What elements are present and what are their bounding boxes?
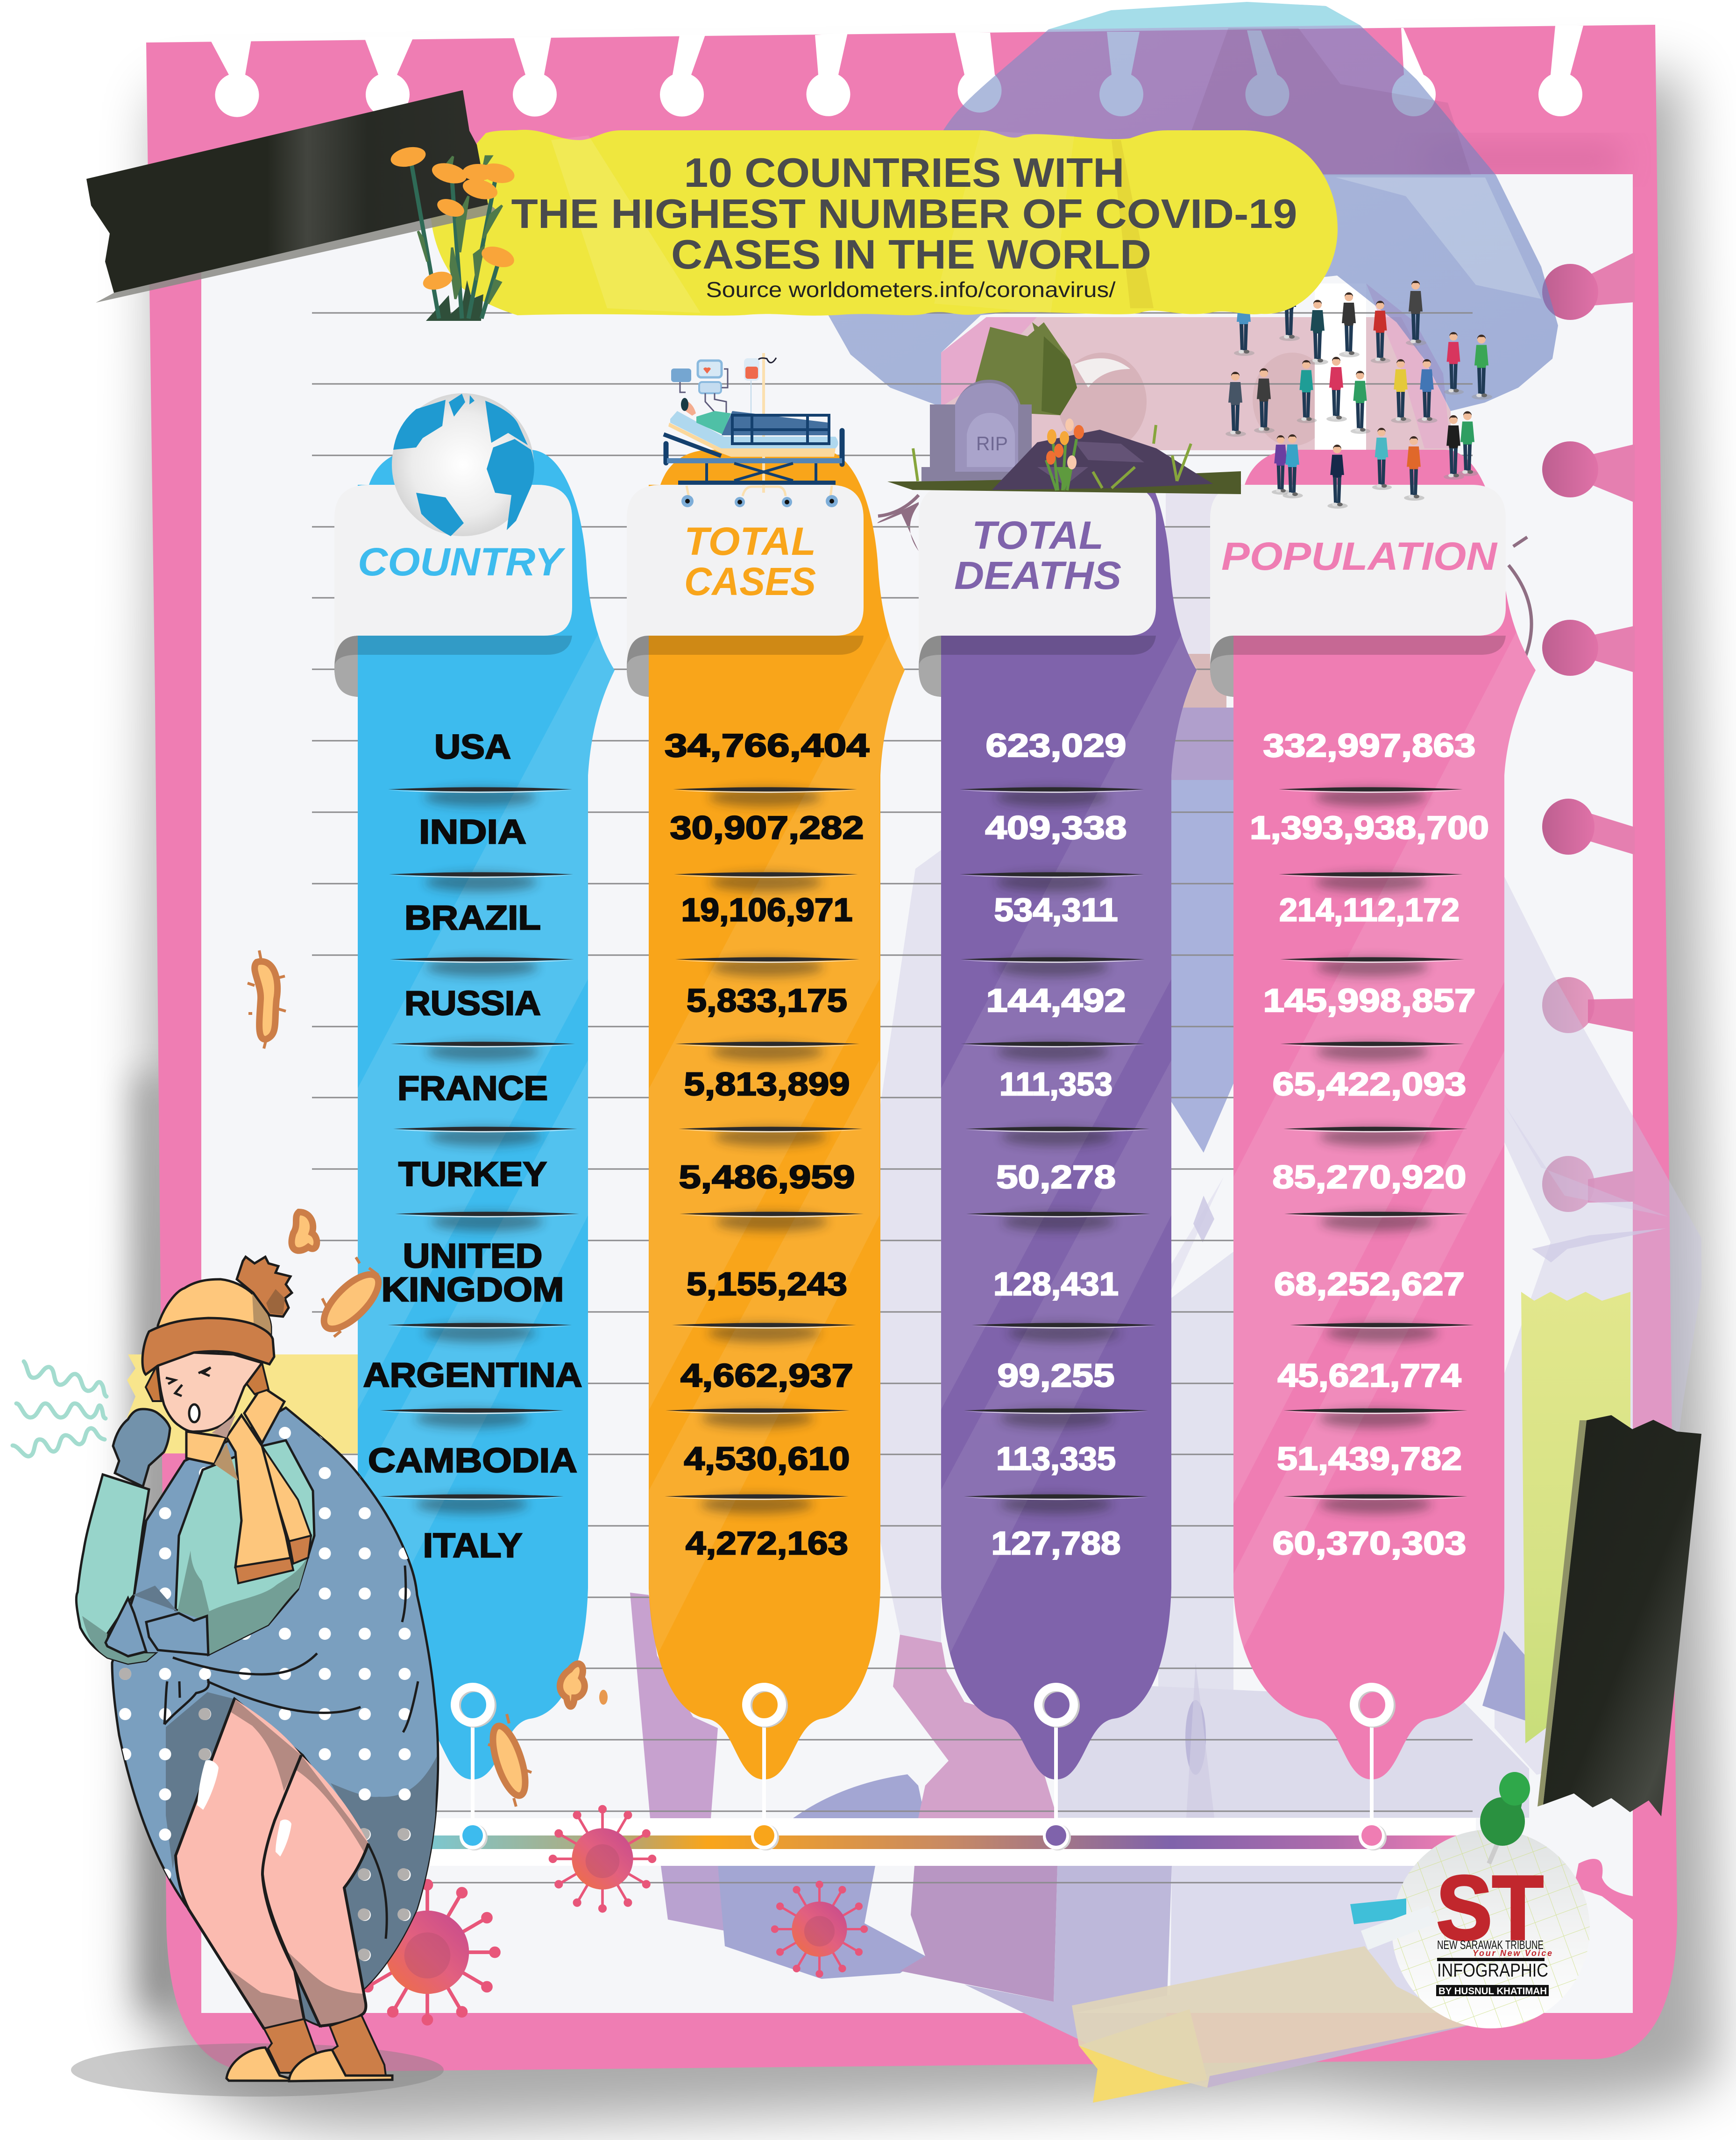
text: total deaths values: 534,311 [994, 892, 1118, 928]
blanket [112, 1408, 438, 1990]
left leg [176, 1699, 320, 2028]
ruled lines [312, 313, 1473, 1883]
column: total deaths (purple) [941, 450, 1209, 1779]
blue glove [718, 1866, 925, 1979]
text: total deaths values: 128,431 [993, 1266, 1119, 1302]
coat below the columns [1046, 1681, 1529, 1818]
lavender lower coat [964, 1866, 1172, 2074]
coat centre panel [1158, 1252, 1233, 1818]
title text: 10 COUNTRIES WITH [684, 149, 1125, 196]
logo badge: New Sarawak Tribune: ST [1437, 1857, 1543, 1959]
small white tape [1361, 1906, 1436, 1950]
icon: hospital bed [664, 353, 842, 507]
column: total cases (orange) [649, 450, 917, 1779]
tape: black, top left [86, 90, 500, 303]
text: total deaths values [985, 727, 1127, 1561]
coat lens between columns [1193, 1196, 1214, 1242]
text: total cases values: 19,106,971 [681, 892, 853, 928]
text: total cases values: 34,766,404 [665, 727, 869, 764]
icon: crowd of people [1226, 276, 1492, 509]
text: total cases values: 4,272,163 [686, 1525, 848, 1561]
cold wavy lines [13, 1361, 106, 1456]
text: total deaths values: 99,255 [998, 1357, 1114, 1394]
text: total deaths values: 111,353 [999, 1066, 1112, 1102]
title banner [431, 130, 1338, 316]
mitten [113, 1409, 170, 1487]
text: country names: USA [434, 728, 511, 766]
text: total deaths values: 409,338 [985, 809, 1127, 846]
text: total cases values: 5,813,899 [684, 1066, 850, 1102]
tape: black, right [1538, 1415, 1701, 1816]
white gap of the face [1315, 283, 1366, 450]
icon: yellow flowers [389, 144, 517, 321]
text: population values [1250, 727, 1489, 1561]
header card: country [334, 485, 572, 697]
icon: gravestone, tree and rocks [887, 322, 1241, 494]
text: population values: 60,370,303 [1272, 1525, 1467, 1561]
text: population values: 1,393,938,700 [1250, 809, 1489, 846]
green push pin [1480, 1772, 1530, 1864]
text: total deaths values: 113,335 [996, 1440, 1116, 1477]
mask strap and neck [1166, 486, 1226, 654]
head [158, 1353, 262, 1431]
source line: Source worldometers.info/coronavirus/ [706, 277, 1116, 302]
text: total cases values: 5,833,175 [687, 982, 847, 1019]
text: total cases values: 4,662,937 [680, 1357, 853, 1394]
title text [511, 149, 1297, 277]
text: population values: 68,252,627 [1274, 1266, 1465, 1302]
text: total deaths values: 144,492 [986, 982, 1126, 1019]
text: total cases values: 5,486,959 [679, 1159, 855, 1195]
right leg [262, 1755, 368, 2026]
text: country names: INDIA [419, 813, 526, 851]
mint sweater [176, 1440, 314, 1655]
text: total cases values: 5,155,243 [687, 1266, 847, 1302]
sleeve [76, 1474, 155, 1664]
icon: globe [392, 393, 534, 536]
text: country names: ARGENTINA [363, 1356, 582, 1394]
text: country names: CAMBODIA [368, 1442, 577, 1480]
coat left panel [878, 850, 941, 1653]
text: population values: 51,439,782 [1277, 1440, 1462, 1477]
text: total deaths values: 127,788 [991, 1525, 1121, 1561]
face [941, 317, 1451, 450]
shadow along paper top [1424, 145, 1621, 175]
header card: population [1210, 485, 1506, 697]
text: country names: BRAZIL [404, 899, 541, 937]
small cyan tape [1350, 1899, 1406, 1924]
text: country names: TURKEY [398, 1155, 547, 1193]
knot of blanket and hand [106, 1598, 146, 1656]
panel: white lined paper [201, 174, 1633, 2013]
text: total deaths values: 50,278 [996, 1159, 1116, 1195]
binder notches [210, 26, 1583, 117]
left side shadow [133, 1074, 175, 2008]
title text: CASES IN THE WORLD [671, 231, 1151, 277]
column: country (blue) [358, 450, 626, 1779]
blanket fold lines [164, 1566, 418, 1939]
text: total cases values [665, 727, 869, 1561]
header card: total deaths: TOTAL [972, 513, 1104, 557]
socks [264, 2015, 386, 2076]
hood top over white [1049, 2, 1360, 29]
scarf [186, 1387, 311, 1583]
text: country names: RUSSIA [404, 985, 541, 1022]
header card: total cases [627, 485, 864, 697]
slippers [227, 2048, 392, 2081]
header card: total deaths: DEATHS [954, 553, 1121, 597]
header card: total cases: TOTAL [684, 519, 816, 563]
text: population values: 65,422,093 [1272, 1066, 1467, 1102]
logo badge: New Sarawak Tribune: Your New Voice [1473, 1949, 1552, 1958]
hood [828, 4, 1558, 411]
illustration: translucent doctor in protective suit [630, 2, 1701, 2074]
text: population values: 45,621,774 [1278, 1357, 1461, 1394]
logo badge: New Sarawak Tribune [1350, 1772, 1590, 2028]
hair [146, 1354, 269, 1401]
pink lilac panel [893, 1635, 1057, 1818]
eyes [1058, 353, 1147, 451]
header card: population: POPULATION [1221, 534, 1498, 578]
header card: total cases: CASES [684, 560, 816, 603]
text: population values: 145,998,857 [1263, 982, 1476, 1019]
coat right panel and sleeve [1492, 852, 1701, 1775]
header card: total deaths [919, 485, 1156, 697]
icons: bacteria [248, 950, 608, 1807]
text: country names: ITALY [423, 1527, 522, 1565]
translucent tape and yellow corner, bottom right [1072, 1946, 1472, 2103]
logo badge: New Sarawak Tribune: NEW SARAWAK TRIBUNE [1437, 1938, 1544, 1952]
text: country names: UNITED [403, 1237, 543, 1275]
text: total cases values: 30,907,282 [670, 809, 864, 846]
text: total cases values: 4,530,610 [684, 1440, 850, 1477]
panel: yellow block behind the character [127, 1354, 358, 1453]
text: population values: 332,997,863 [1263, 727, 1476, 764]
timeline bar [430, 1687, 1476, 1866]
text: population values: 214,112,172 [1279, 892, 1460, 928]
text: country names: FRANCE [397, 1070, 548, 1107]
header card: country: COUNTRY [358, 540, 566, 584]
logo badge: New Sarawak Tribune: BY HUSNUL KHATIMAH [1438, 1986, 1547, 1997]
arc lines behind the cards [878, 495, 1531, 677]
text: country names: KINGDOM [381, 1271, 564, 1309]
sticky note: yellow-green [1521, 1292, 1630, 1743]
text: population values: 85,270,920 [1272, 1159, 1467, 1195]
text: total deaths values: 623,029 [985, 727, 1127, 764]
logo badge: New Sarawak Tribune: INFOGRAPHIC [1437, 1960, 1548, 1981]
illustration: shivering woman wrapped in a blanket [13, 1257, 444, 2097]
icons: coronavirus particles [356, 1807, 867, 2024]
connectors and ring markers [455, 1687, 1391, 1850]
hat [142, 1257, 292, 1375]
lilac glove, left [630, 1593, 718, 1818]
floor shadow [71, 2043, 444, 2097]
row dividers [380, 787, 1474, 1514]
icon: gravestone, tree and rocks: RIP [976, 432, 1008, 454]
text: country names [363, 728, 582, 1565]
title text: THE HIGHEST NUMBER OF COVID-19 [511, 191, 1297, 237]
column: population (pink) [1233, 450, 1541, 1779]
binder tabs on the right edge [1542, 252, 1635, 1920]
